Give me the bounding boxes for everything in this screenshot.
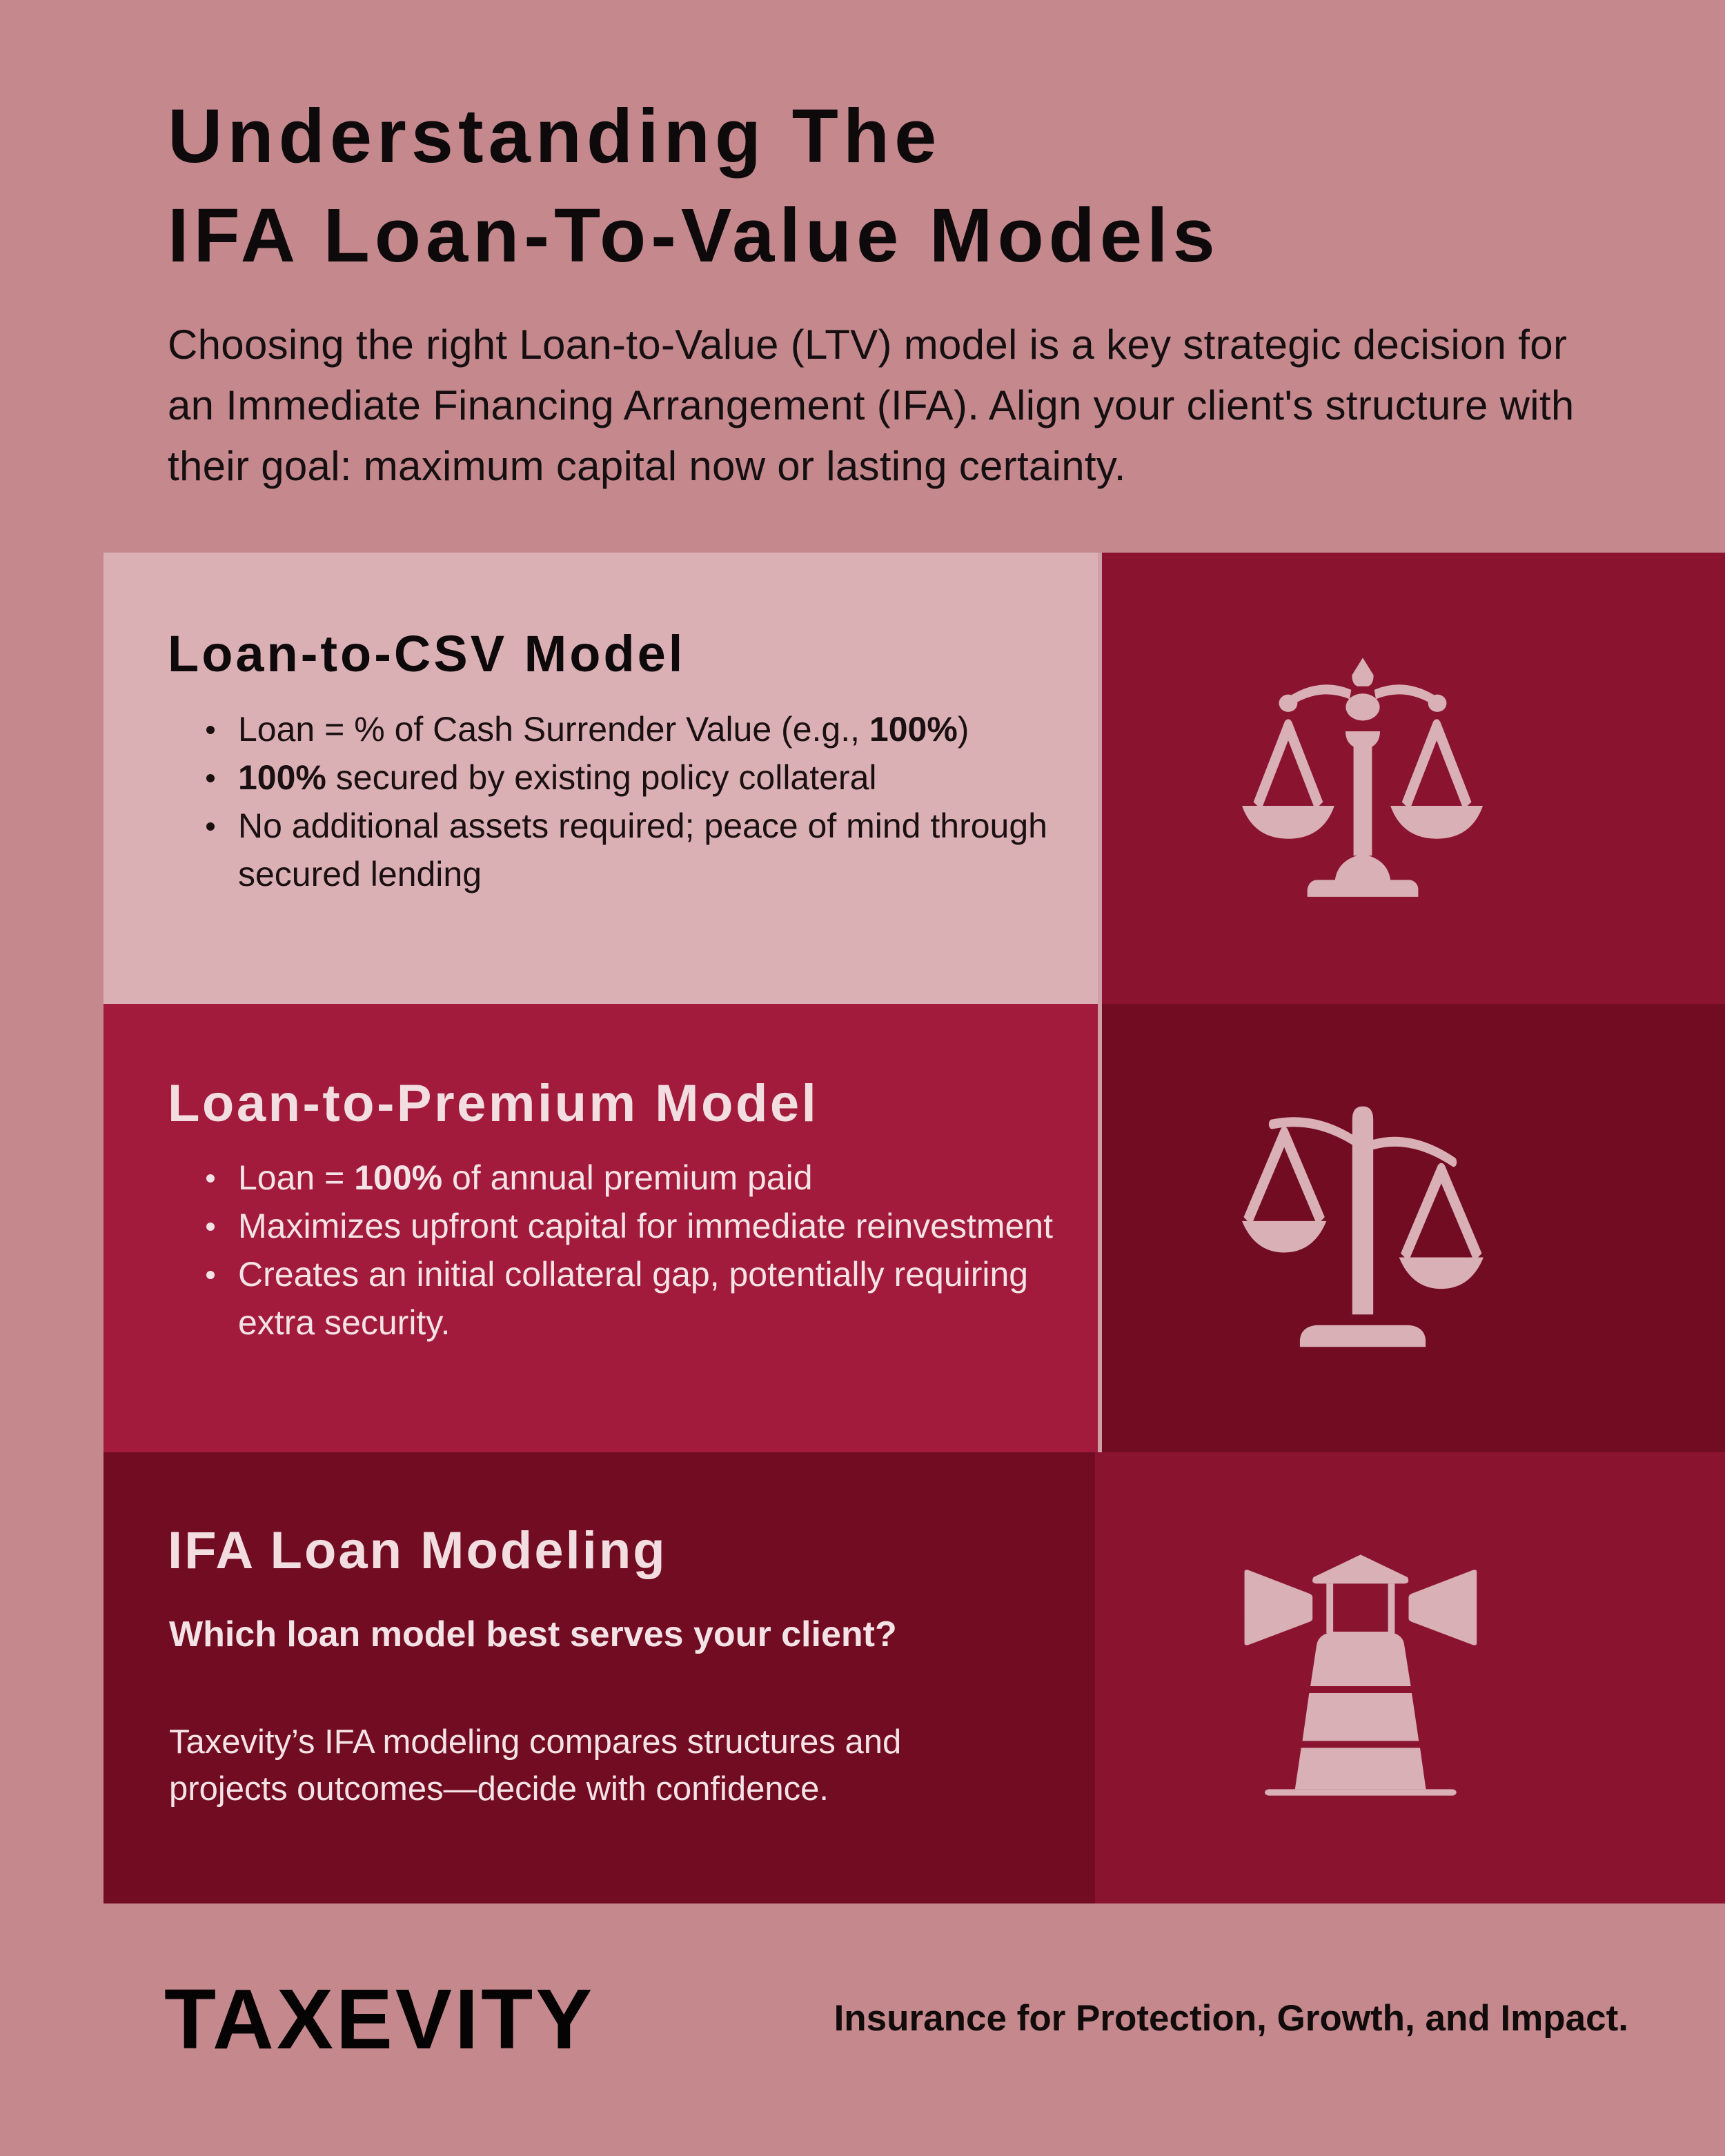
bullet list: premium <box>206 1158 1053 1342</box>
bullet list: premium: Creates an initial collateral gap, potentially requiring <box>238 1255 1028 1294</box>
bullet list: premium: Maximizes upfront capital for immediate reinvestment <box>238 1207 1053 1245</box>
intro paragraph: Choosing the right Loan-to-Value (LTV) model is a key strategic decision for <box>168 322 1567 368</box>
intro paragraph <box>168 322 1574 489</box>
tagline: Insurance for Protection, Growth, and Impact. <box>834 1998 1628 2039</box>
icons: scales <box>1242 658 1483 1347</box>
bullet list: premium: Loan = 100% of annual premium paid <box>238 1158 813 1197</box>
subheading question: Which loan model best serves your client? <box>169 1614 897 1654</box>
logo: TAXEVITY: TAXEVITY <box>164 1972 595 2067</box>
title: Understanding The <box>168 94 941 179</box>
bullet list: CSV: 100% secured by existing policy collateral <box>238 758 876 797</box>
icon: balanced scale <box>1242 657 1483 897</box>
bullet list: CSV: No additional assets required; peace of mind through <box>238 807 1047 845</box>
body text <box>169 1723 901 1808</box>
title: IFA Loan-To-Value Models <box>168 193 1220 278</box>
body text: projects outcomes—decide with confidence. <box>169 1770 829 1808</box>
panel: loan-to-premium text <box>103 1004 1098 1452</box>
panel: loan-to-CSV text <box>103 553 1098 1004</box>
bullet list: premium: extra security. <box>238 1303 450 1342</box>
icon: lighthouse <box>1245 1554 1477 1796</box>
panel: premium icon background <box>1102 1004 1725 1452</box>
intro paragraph: an Immediate Financing Arrangement (IFA). Align your client's structure with <box>168 382 1574 428</box>
bullet list: CSV: Loan = % of Cash Surrender Value (e.g., 100%) <box>238 710 969 749</box>
body text: Taxevity’s IFA modeling compares structures and <box>169 1723 901 1761</box>
heading: Loan-to-CSV Model: Loan-to-CSV Model <box>168 625 685 682</box>
heading: IFA Loan Modeling: IFA Loan Modeling <box>168 1521 667 1580</box>
panel: IFA loan modeling text <box>103 1452 1095 1903</box>
panel: CSV icon background <box>1102 553 1725 1004</box>
bullet list: CSV: secured lending <box>238 855 482 893</box>
title <box>168 94 1220 278</box>
heading: Loan-to-Premium Model: Loan-to-Premium Model <box>168 1074 818 1133</box>
panel: lighthouse icon background <box>1095 1452 1725 1903</box>
icon: tilted scale <box>1242 1107 1483 1347</box>
intro paragraph: their goal: maximum capital now or lasting certainty. <box>168 443 1126 489</box>
bullet list: CSV <box>206 710 1047 893</box>
